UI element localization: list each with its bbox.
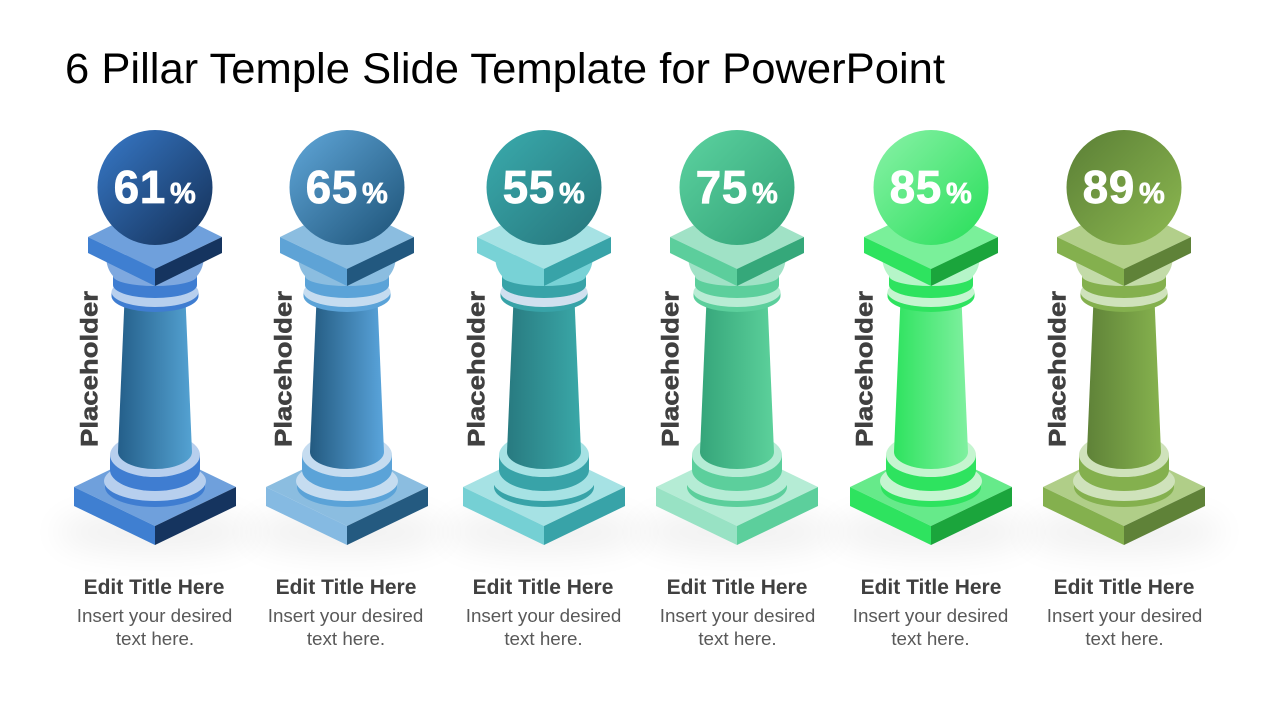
percentage circle [680, 130, 794, 245]
floor shadow [55, 510, 255, 554]
column shaft [1087, 300, 1161, 469]
rotated label: Placeholder [77, 291, 104, 447]
item body: text here. [307, 628, 385, 649]
capital plate [670, 204, 804, 286]
capital plate [1057, 204, 1191, 286]
item title: Edit Title Here [667, 576, 807, 599]
base plinth [74, 448, 236, 545]
base plinth [850, 448, 1012, 545]
rotated label: Placeholder [658, 291, 685, 447]
rotated label: Placeholder [271, 291, 298, 447]
floor shadow [247, 510, 447, 554]
item title: Edit Title Here [84, 576, 224, 599]
base rings [880, 433, 982, 507]
floor shadow [1024, 510, 1224, 554]
column shaft [507, 300, 581, 469]
base plinth [266, 448, 428, 545]
item body: text here. [698, 628, 777, 649]
base rings [686, 433, 788, 507]
rotated label: Placeholder [464, 291, 491, 447]
rotated label: Placeholder [852, 291, 879, 447]
capital plate [88, 204, 222, 286]
floor shadow [637, 510, 837, 554]
base rings [493, 433, 595, 507]
item body: text here. [504, 628, 583, 649]
percentage circle: 65% [306, 161, 388, 213]
percentage circle [290, 130, 404, 245]
capital plate [477, 204, 611, 286]
capital plate [864, 204, 998, 286]
item body: text here. [116, 628, 194, 649]
pillar 4: 75% [637, 130, 837, 649]
capital rings [106, 255, 204, 312]
capital rings [495, 255, 593, 312]
item body: Insert your desired [466, 605, 621, 626]
floor shadow [444, 510, 644, 554]
column shaft [894, 300, 968, 469]
item body: Insert your desired [660, 605, 815, 626]
capital rings [1075, 255, 1173, 312]
base rings [104, 433, 206, 507]
pillar 5: 85% [831, 130, 1031, 649]
column shaft [118, 300, 192, 469]
title: 6 Pillar Temple Slide Template for PowerPoint [65, 45, 945, 93]
percentage circle [98, 130, 212, 245]
column shaft [310, 300, 384, 469]
floor shadow [831, 510, 1031, 554]
item body: Insert your desired [853, 605, 1008, 626]
capital plate [280, 204, 414, 286]
base rings [296, 433, 398, 507]
pillar 6: 89% [1024, 130, 1224, 649]
percentage circle [1066, 130, 1182, 245]
percentage circle: 89% [1083, 161, 1165, 213]
percentage circle [874, 130, 988, 245]
column shaft [700, 300, 774, 469]
pillar 1: 61% [55, 130, 255, 649]
item body: text here. [891, 628, 970, 649]
percentage circle [486, 130, 602, 245]
rotated label: Placeholder [1045, 291, 1072, 447]
capital rings [688, 255, 786, 312]
pillar 3: 55% [444, 130, 644, 649]
percentage circle: 55% [503, 161, 585, 213]
base rings [1073, 433, 1175, 507]
base plinth [656, 448, 818, 545]
pillar 2: 65% [247, 130, 447, 649]
item body: Insert your desired [268, 605, 423, 626]
capital rings [298, 255, 396, 312]
percentage circle: 61% [114, 161, 196, 213]
item body: text here. [1085, 628, 1164, 649]
item body: Insert your desired [77, 605, 232, 626]
base plinth [1043, 448, 1205, 545]
base plinth [463, 448, 625, 545]
item title: Edit Title Here [473, 576, 613, 599]
item body: Insert your desired [1047, 605, 1202, 626]
percentage circle: 75% [696, 161, 778, 213]
capital rings [882, 255, 980, 312]
percentage circle: 85% [890, 161, 972, 213]
item title: Edit Title Here [276, 576, 416, 599]
item title: Edit Title Here [861, 576, 1001, 599]
item title: Edit Title Here [1054, 576, 1194, 599]
